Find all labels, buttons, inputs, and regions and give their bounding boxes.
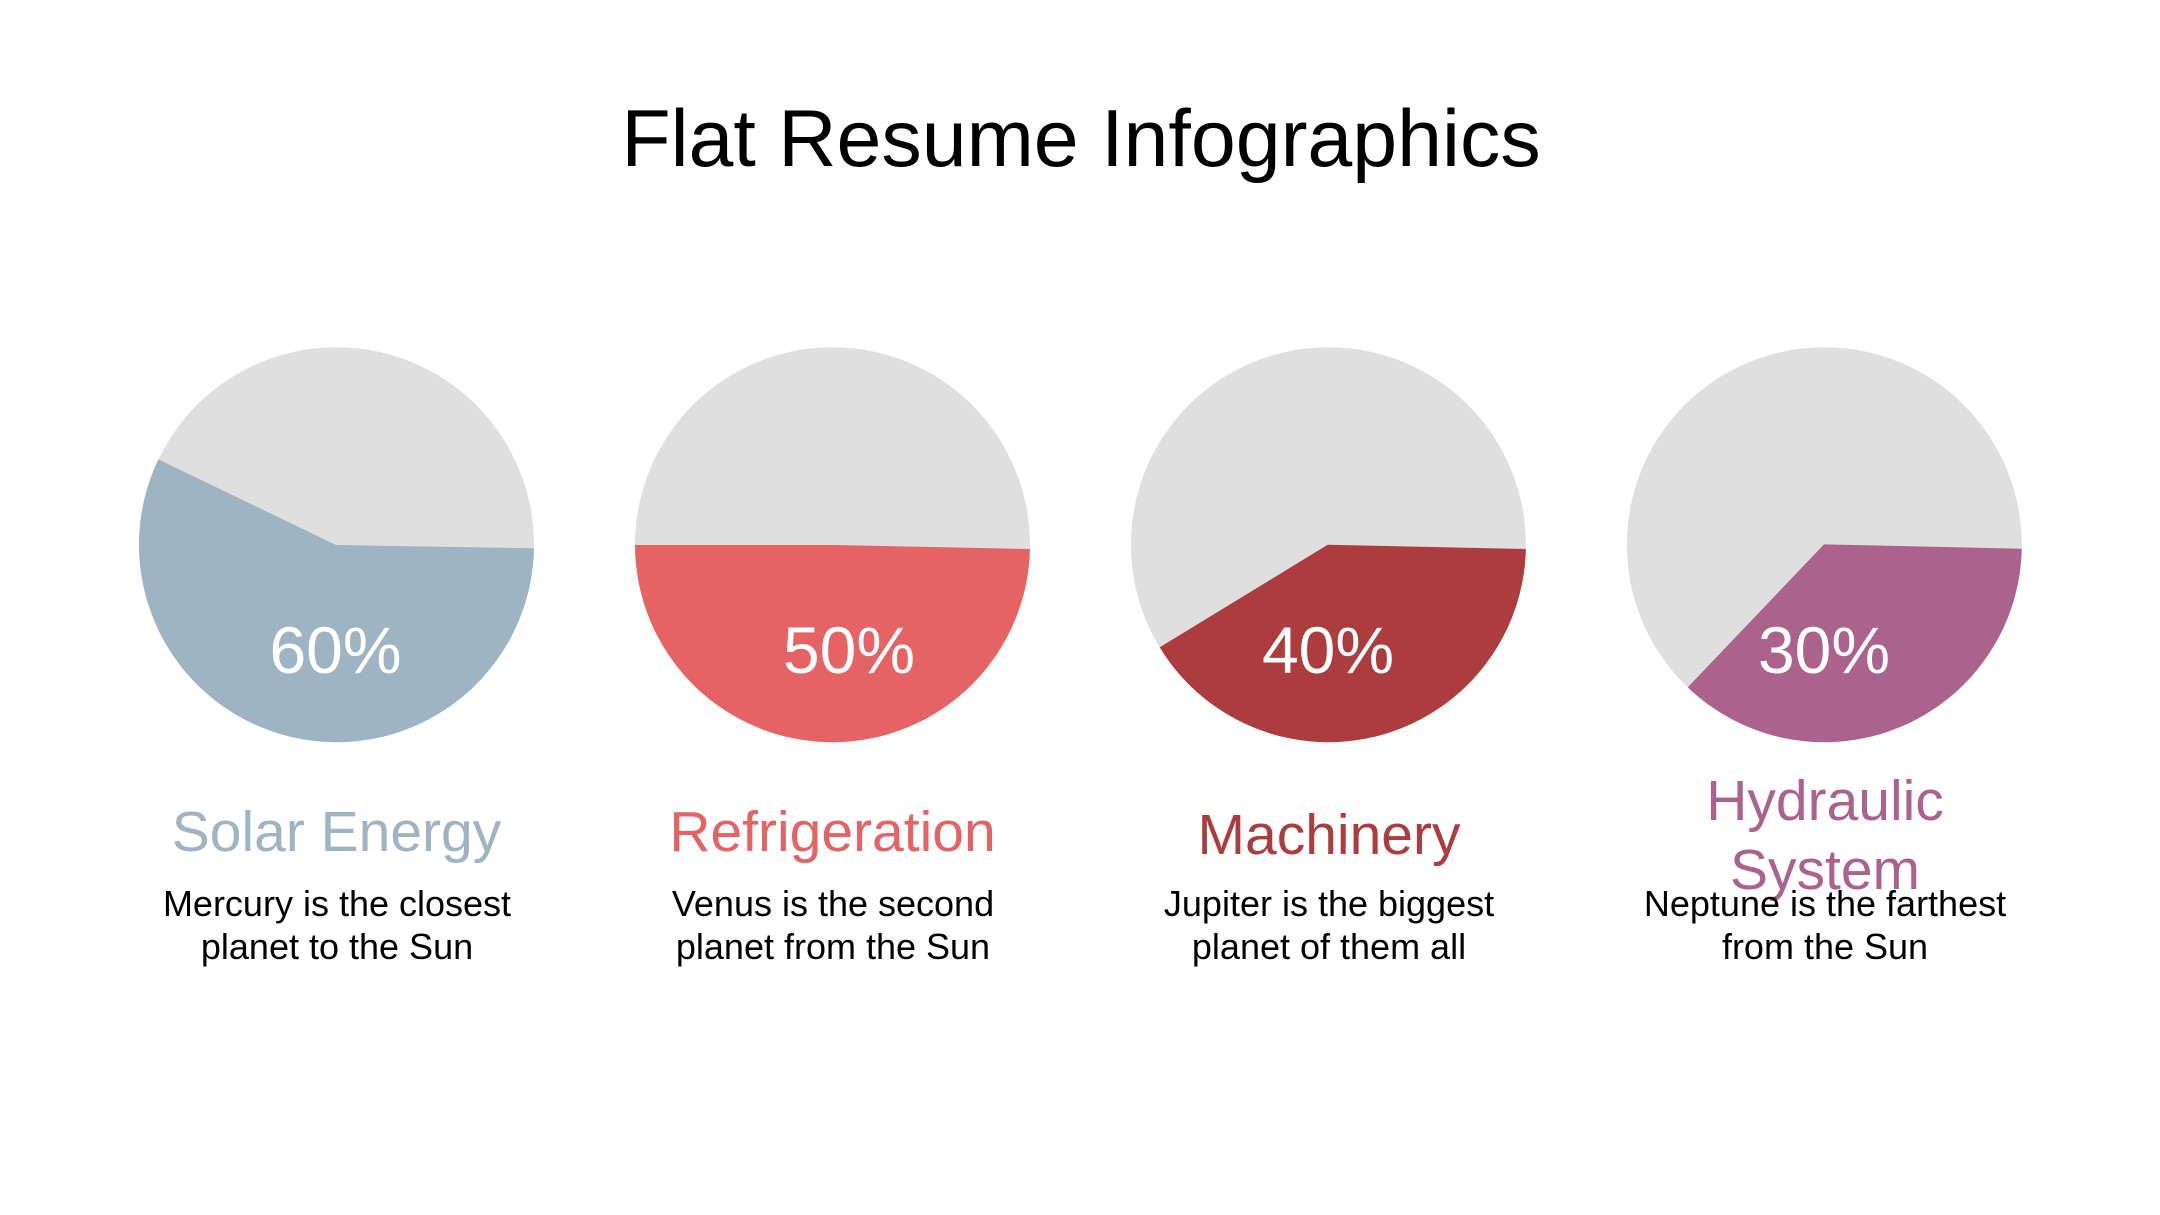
description: Jupiter: Jupiter is the biggest	[1164, 883, 1494, 924]
panel: Refrigeration	[635, 347, 1030, 967]
panel: Hydraulic System	[1627, 347, 2022, 967]
panel: Solar Energy	[139, 347, 534, 967]
heading: Hydraulic System: Hydraulic	[1706, 769, 1944, 833]
description: Venus: Venus is the second	[672, 883, 994, 924]
heading: Machinery: Machinery	[1198, 803, 1461, 867]
pie chart: 60%	[139, 347, 534, 742]
heading: Refrigeration: Refrigeration	[669, 800, 996, 864]
pie chart: 40%	[1131, 347, 1526, 742]
percentage: 60%: 60%	[269, 613, 402, 687]
description: Mercury: Mercury is the closest	[163, 883, 511, 924]
percentage: 50%: 50%	[783, 613, 915, 687]
panel: Machinery	[1131, 347, 1526, 967]
percentage: 40%: 40%	[1262, 613, 1394, 687]
pie chart: 30%	[1627, 347, 2022, 742]
description: Venus: planet from the Sun	[676, 926, 990, 967]
pie chart: 50%	[635, 347, 1030, 742]
heading: Hydraulic System: System	[1730, 838, 1920, 902]
description: Neptune: Neptune is the farthest	[1644, 883, 2006, 924]
description: Jupiter: planet of them all	[1192, 926, 1466, 967]
title: Flat Resume Infographics	[621, 94, 1541, 184]
heading: Solar Energy: Solar Energy	[172, 800, 502, 864]
percentage: 30%: 30%	[1758, 613, 1890, 687]
description: Mercury: planet to the Sun	[201, 926, 473, 967]
description: Neptune: from the Sun	[1722, 926, 1928, 967]
